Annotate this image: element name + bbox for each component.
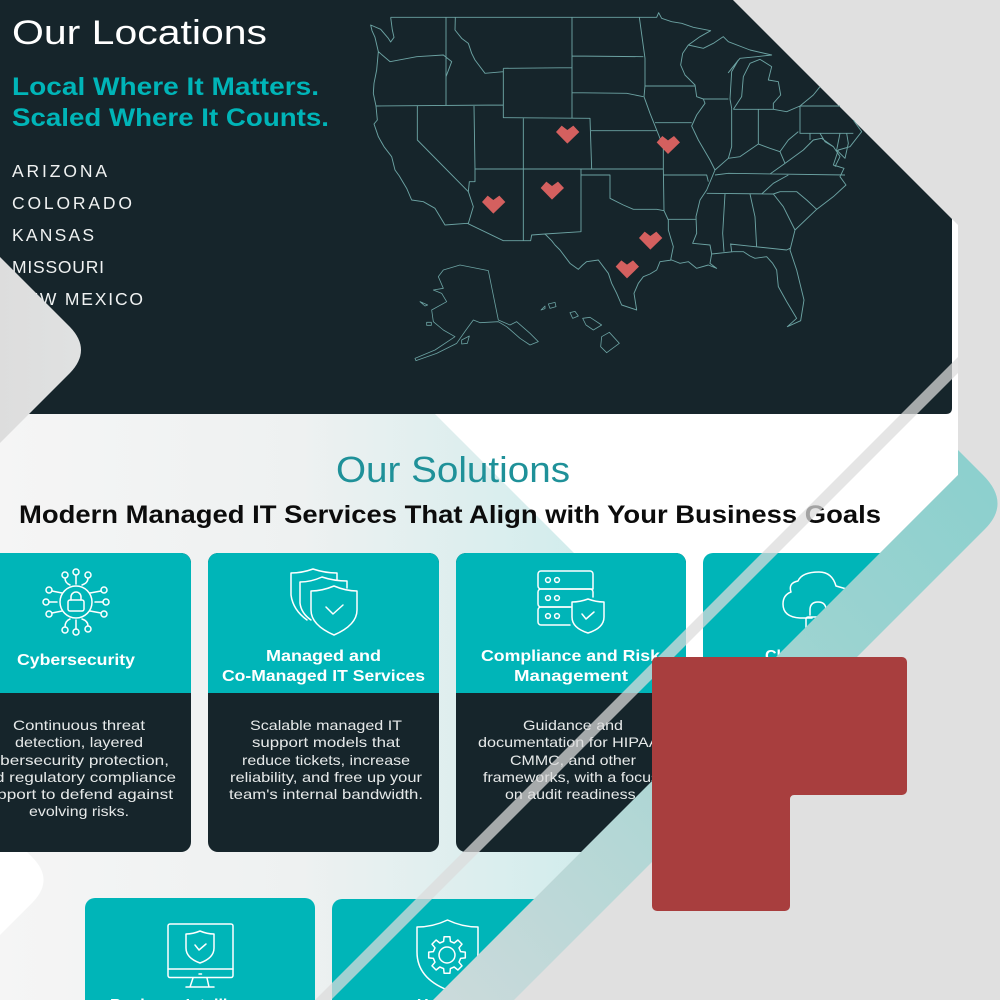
- card description: Continuous threat: [13, 717, 145, 733]
- icon: network lock: [43, 569, 109, 635]
- card title: Managed and: [266, 648, 381, 665]
- card description: CMMC, and other: [510, 752, 636, 768]
- alaska and hawaii: [415, 265, 619, 361]
- state list: [12, 161, 143, 309]
- card title: [222, 648, 425, 685]
- card: cybersecurity: [0, 553, 191, 852]
- card description: support models that: [252, 734, 400, 750]
- card description: [478, 717, 664, 802]
- card description: [229, 717, 423, 802]
- card: managed IT: [208, 553, 439, 852]
- card description: Guidance and: [523, 717, 623, 733]
- card description: evolving risks.: [29, 803, 129, 819]
- US map: [371, 13, 862, 361]
- state list: NEW MEXICO: [12, 289, 143, 309]
- white diamond accent: [0, 825, 44, 935]
- card description: on audit readiness.: [505, 786, 640, 802]
- card title: Cybersecurity: [17, 652, 135, 669]
- card description: reliability, and free up your: [230, 769, 422, 785]
- wide teal diagonal band: [390, 450, 998, 1000]
- subheading: Local Where It Matters.: [12, 73, 319, 101]
- icon: gear shield: [417, 920, 478, 990]
- card description: detection, layered: [15, 734, 143, 750]
- icon: cloud lock: [783, 572, 850, 639]
- card title: Cloud: [765, 648, 810, 665]
- card: cloud: [703, 553, 933, 700]
- state list: ARIZONA: [12, 161, 107, 181]
- grey lower-right field: [513, 513, 1000, 1000]
- state list: COLORADO: [12, 193, 132, 213]
- red stepped block: [652, 657, 907, 911]
- card description: reduce tickets, increase: [242, 752, 410, 768]
- card description: frameworks, with a focus: [483, 769, 659, 785]
- icon: shields: [291, 569, 357, 635]
- subheading: Scaled Where It Counts.: [12, 104, 329, 132]
- card: updates: [332, 899, 562, 1000]
- card title: Management: [514, 668, 629, 685]
- card: compliance: [456, 553, 686, 852]
- icon: servers with shield: [538, 571, 604, 633]
- state list: KANSAS: [12, 225, 94, 245]
- dark panel background: [0, 0, 952, 414]
- card description: documentation for HIPAA,: [478, 734, 664, 750]
- state list: MISSOURI: [12, 257, 104, 277]
- icon: monitor shield: [168, 924, 233, 987]
- location hearts: [482, 126, 680, 278]
- soft gradient shape behind solutions: [0, 414, 727, 1000]
- card description: Scalable managed IT: [250, 717, 403, 733]
- subheading: solutions: Modern Managed IT Services That Align with Your Business Goals: [19, 501, 881, 529]
- card: business intelligence: [85, 898, 315, 1000]
- state outlines: [371, 13, 862, 327]
- card title: [481, 648, 660, 685]
- card description: team's internal bandwidth.: [229, 786, 423, 802]
- subheading: [12, 73, 329, 132]
- panel: our locations: [0, 0, 952, 414]
- thin grey diagonal band: [284, 357, 958, 1000]
- heading: our locations: Our Locations: [12, 14, 267, 52]
- card title: Compliance and Risk: [481, 648, 660, 665]
- card title: Co-Managed IT Services: [222, 668, 425, 685]
- heading: our solutions: Our Solutions: [336, 449, 570, 490]
- grey left diamond: [0, 257, 81, 443]
- card description: [0, 717, 176, 819]
